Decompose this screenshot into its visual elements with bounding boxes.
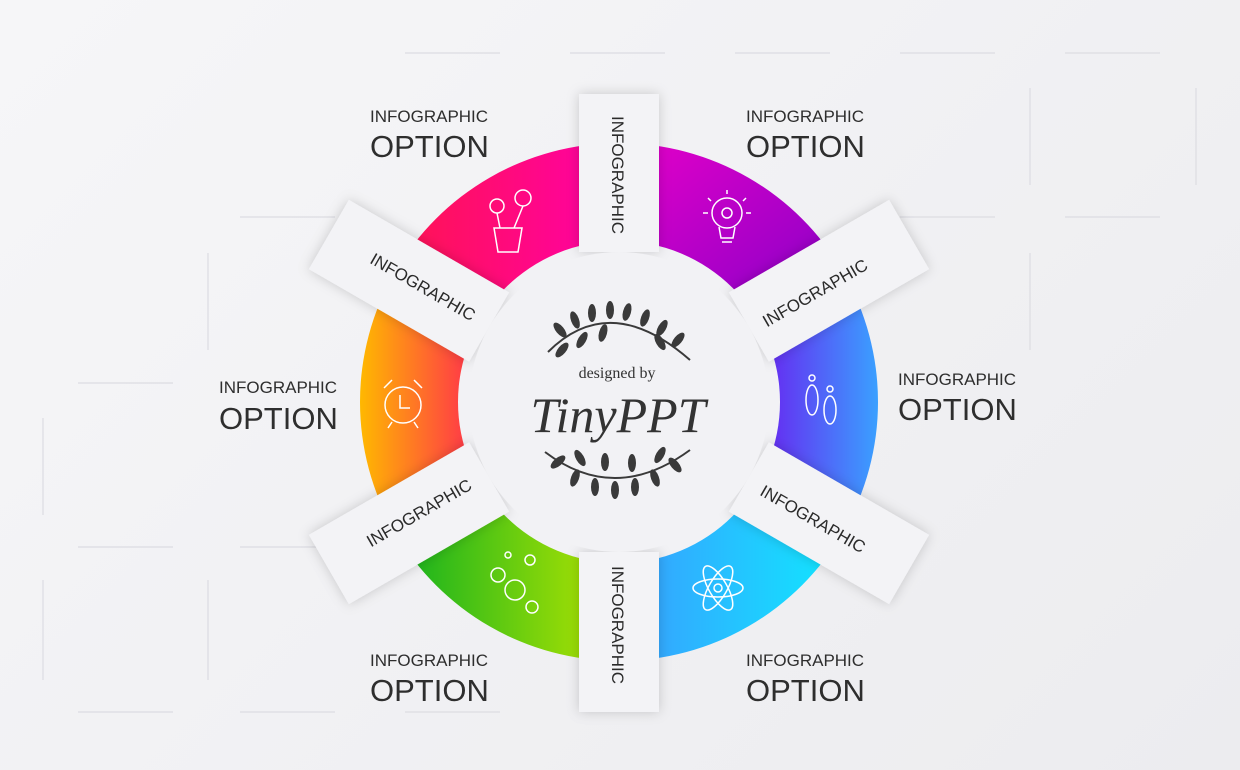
band label: lower left: INFOGRAPHIC	[363, 475, 475, 551]
label: bottom-right option	[746, 651, 865, 708]
label: top-right option	[746, 107, 865, 164]
band label: top: INFOGRAPHIC	[608, 116, 627, 234]
band label: lower right: INFOGRAPHIC	[757, 481, 869, 557]
label: right option: OPTION	[898, 392, 1017, 427]
ring segment: pink	[395, 143, 619, 322]
band label: upper left: INFOGRAPHIC	[367, 249, 479, 325]
label: bottom-left option: INFOGRAPHIC	[370, 651, 488, 670]
label: right option: INFOGRAPHIC	[898, 370, 1016, 389]
band: top	[579, 94, 659, 252]
label: right option	[898, 370, 1017, 427]
icon: flowers	[490, 190, 531, 252]
band label: upper right: INFOGRAPHIC	[759, 255, 871, 331]
label: top-right option: INFOGRAPHIC	[746, 107, 864, 126]
label: left option: OPTION	[219, 401, 338, 436]
ring segment: cyan	[619, 482, 843, 661]
icon: atom	[693, 562, 743, 614]
band label: bottom: INFOGRAPHIC	[608, 566, 627, 684]
ring segment: orange	[360, 272, 480, 532]
band: lower left	[309, 442, 509, 604]
label: bottom-right option: OPTION	[746, 673, 865, 708]
icon: bubbles	[491, 552, 538, 613]
label: bottom-left option	[370, 651, 489, 708]
logo	[530, 301, 709, 499]
label: bottom-left option: OPTION	[370, 673, 489, 708]
icon: bulb	[703, 190, 751, 242]
band: bottom	[579, 552, 659, 712]
label: left option	[219, 378, 338, 436]
leaves top	[548, 301, 690, 360]
text: TinyPPT: TinyPPT	[530, 387, 709, 443]
ring segment: blue	[758, 272, 878, 532]
icon: alarm clock	[384, 380, 422, 428]
ring segment: green	[395, 482, 619, 661]
label: top-left option: INFOGRAPHIC	[370, 107, 488, 126]
leaves bottom	[545, 445, 690, 499]
band: upper left	[309, 200, 509, 362]
label: top-left option: OPTION	[370, 129, 489, 164]
label: top-right option: OPTION	[746, 129, 865, 164]
label: top-left option	[370, 107, 489, 164]
center disc	[458, 241, 780, 563]
text: designed by: designed by	[579, 365, 655, 382]
ring segment: magenta	[619, 143, 843, 322]
band: lower right	[729, 442, 929, 604]
icon: feet	[806, 375, 836, 424]
band: upper right	[729, 200, 929, 362]
label: left option: INFOGRAPHIC	[219, 378, 337, 397]
label: bottom-right option: INFOGRAPHIC	[746, 651, 864, 670]
